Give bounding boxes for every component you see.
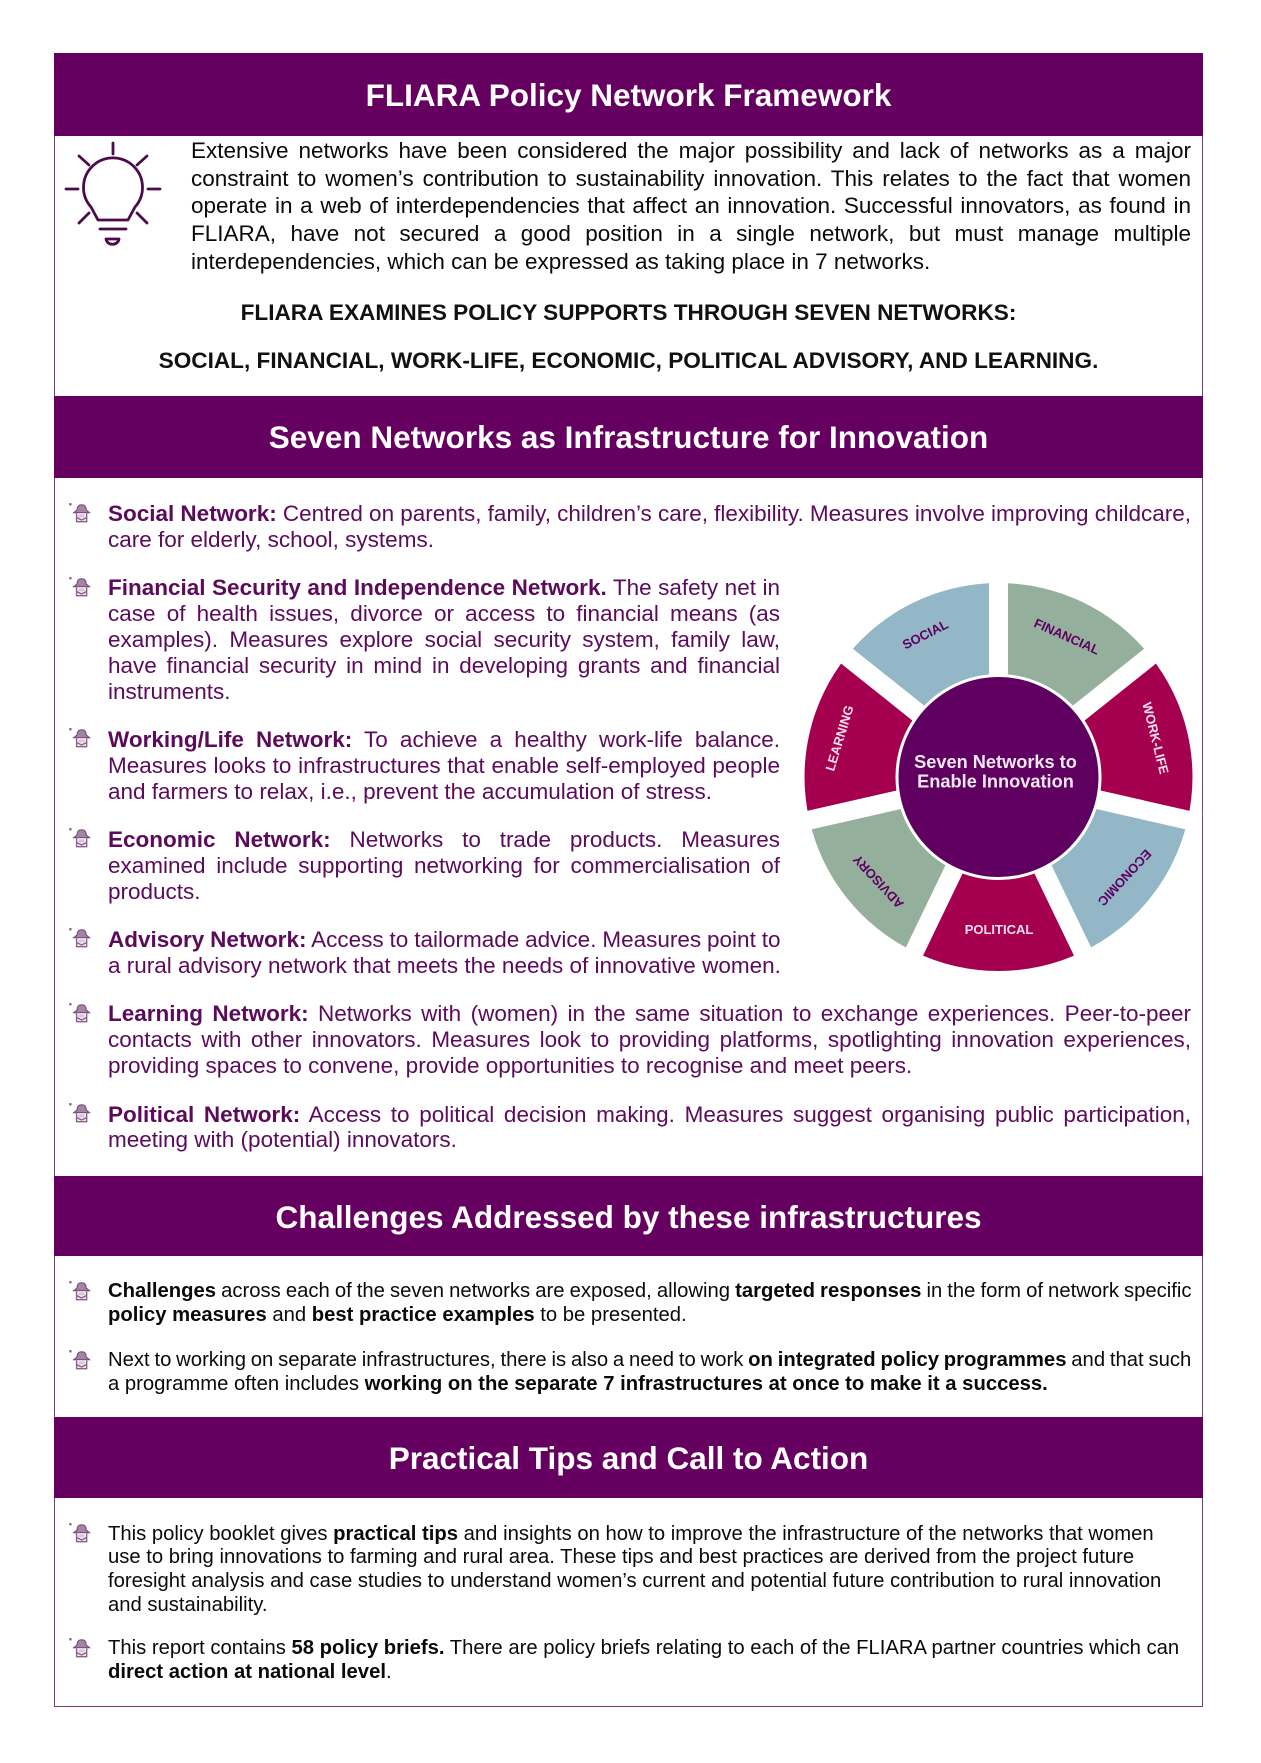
- text: learning network: Learning Network: Networks with (women) in the same situation to exchange experiences. Peer-to-peer: [108, 1001, 1191, 1026]
- heading: Seven Networks as Infrastructure for Innovation: [54, 396, 1203, 478]
- label: advisory: ADVISORY: [850, 852, 907, 911]
- text: economic network: products.: [108, 879, 201, 904]
- heading: FLIARA Policy Network Framework: [54, 53, 1203, 136]
- segment: political: [914, 777, 1083, 971]
- text: social network: Social Network: Centred on parents, family, children’s care, flexibility. Measures involve improving childcare,: [108, 501, 1191, 526]
- text: political network: meeting with (potential) innovators.: [108, 1127, 457, 1152]
- text: working/life network: Measures looks to infrastructures that enable self-employed people: [108, 753, 780, 778]
- text: social network: care for elderly, school, systems.: [108, 527, 434, 552]
- bullet icon: financial: [69, 577, 91, 596]
- text: financial network: examples). Measures explore social security system, family law,: [108, 627, 780, 652]
- text: 58 policy briefs: This report contains 58 policy briefs. There are policy briefs relating to each of the FLIARA partner countries which can: [108, 1637, 1179, 1659]
- bullet icon: tips 1: [69, 1523, 91, 1542]
- bullet icon: tips 2: [69, 1638, 91, 1658]
- text: integrated programmes: a programme often includes working on the separate 7 infrastructures at once to make it a success.: [108, 1373, 1048, 1395]
- label: financial: FINANCIAL: [1032, 615, 1102, 658]
- bullet icon: advisory: [69, 928, 91, 948]
- text: financial network: [108, 575, 780, 704]
- text: policy booklet: This policy booklet gives practical tips and insights on how to improve the infrastructure of the networks that women: [108, 1523, 1154, 1545]
- text: working/life network: and farmers to relax, i.e., prevent the accumulation of stress.: [108, 779, 712, 804]
- text: political network: [108, 1102, 1191, 1152]
- text: learning network: contacts with other innovators. Measures look to providing platforms, spotlighting innovation experiences,: [108, 1027, 1191, 1052]
- text: policy booklet: and sustainability.: [108, 1594, 267, 1616]
- segment: social: [847, 583, 998, 777]
- text: 58 policy briefs: direct action at national level.: [108, 1661, 392, 1683]
- text: working/life network: Working/Life Network: To achieve a healthy work-life balance.: [108, 727, 780, 752]
- text: economic network: examined include supporting networking for commercialisation of: [108, 853, 780, 878]
- text: integrated programmes: Next to working on separate infrastructures, there is also a need to work on integrated policy programmes and that such: [108, 1349, 1191, 1371]
- text: political network: Political Network: Access to political decision making. Measures suggest organising public participation,: [108, 1102, 1191, 1127]
- text: economic network: Economic Network: Networks to trade products. Measures: [108, 827, 780, 852]
- heading: Seven Networks as Infrastructure for Innovation: Seven Networks as Infrastructure for Innovation: [269, 419, 988, 455]
- text: policy booklet: use to bring innovations to farming and rural area. These tips and best practices are derived from the project future: [108, 1546, 1134, 1568]
- segment: economic: [998, 777, 1188, 952]
- heading: Challenges Addressed by these infrastructures: Challenges Addressed by these infrastructures: [275, 1199, 982, 1235]
- label: political: POLITICAL: [965, 922, 1033, 937]
- label: learning: LEARNING: [822, 703, 857, 773]
- text: challenges exposed: Challenges across each of the seven networks are exposed, allowing targeted responses in the form of network specific: [108, 1280, 1192, 1302]
- segment: financial: [998, 583, 1150, 777]
- text block: introduction: constraint to women’s contribution to sustainability innovation. This relates to the fact that women: [191, 166, 1191, 191]
- text: policy booklet: [108, 1523, 1161, 1616]
- text: working/life network: [108, 727, 780, 804]
- text block: introduction: interdependencies, which can be expressed as taking place in 7 networks.: [191, 249, 930, 274]
- text block: introduction: Extensive networks have been considered the major possibility and lack of networks as a major: [191, 138, 1191, 163]
- bullet icon: working life: [69, 728, 91, 748]
- text: financial network: Financial Security and Independence Network. The safety net in: [108, 575, 780, 600]
- bullet icon: challenges 1: [69, 1281, 91, 1300]
- text: 58 policy briefs: [108, 1637, 1179, 1683]
- bullet icon: challenges 2: [69, 1350, 91, 1370]
- text: social network: [108, 501, 1191, 552]
- label: work-life: WORK-LIFE: [1139, 701, 1172, 776]
- label: economic: ECONOMIC: [1094, 846, 1155, 909]
- center label: Enable Innovation: [917, 772, 1074, 792]
- callout: seven networks statement line 1: FLIARA EXAMINES POLICY SUPPORTS THROUGH SEVEN NETWORKS:: [241, 300, 1016, 325]
- center circle: [898, 677, 1098, 877]
- text: integrated programmes: [108, 1349, 1191, 1395]
- bullet icon: economic: [69, 828, 91, 848]
- text: advisory network: Advisory Network: Access to tailormade advice. Measures point to: [108, 927, 780, 952]
- heading: Practical Tips and Call to Action: [54, 1417, 1203, 1498]
- segment: advisory: [809, 777, 998, 952]
- text block: introduction: FLIARA, have not secured a good position in a single network, but must manage multiple: [191, 221, 1191, 246]
- heading: Challenges Addressed by these infrastructures: [54, 1176, 1203, 1256]
- segment: work-life: [998, 656, 1192, 820]
- heading: FLIARA Policy Network Framework: FLIARA Policy Network Framework: [366, 77, 891, 113]
- segment: learning: [805, 656, 998, 820]
- callout: seven networks statement line 2: SOCIAL, FINANCIAL, WORK-LIFE, ECONOMIC, POLITICAL ADVISORY, AND LEARNING.: [159, 348, 1098, 373]
- text: financial network: have financial security in mind in developing grants and financial: [108, 653, 780, 678]
- label: social: SOCIAL: [900, 617, 951, 652]
- text block: introduction: operate in a web of interdependencies that affect an innovation. Successful innovators, as found in: [191, 193, 1191, 218]
- text: challenges exposed: policy measures and best practice examples to be presented.: [108, 1304, 687, 1326]
- heading: Practical Tips and Call to Action: Practical Tips and Call to Action: [389, 1440, 868, 1476]
- icon: light bulb: [64, 142, 162, 246]
- bullet icon: social: [69, 503, 91, 522]
- text: learning network: providing spaces to convene, provide opportunities to recognise and meet peers.: [108, 1053, 912, 1078]
- text: economic network: [108, 827, 780, 904]
- text: learning network: [108, 1001, 1191, 1078]
- text: policy booklet: foresight analysis and case studies to understand women’s current and potential future contribution to rural innovation: [108, 1570, 1161, 1592]
- center label: Seven Networks to: [914, 752, 1077, 772]
- text: challenges exposed: [108, 1280, 1192, 1326]
- chart: seven networks wheel: [804, 583, 1202, 971]
- text: financial network: case of health issues, divorce or access to financial means (as: [108, 601, 780, 626]
- text: financial network: instruments.: [108, 679, 231, 704]
- bullet icon: learning: [69, 1003, 91, 1022]
- text block: introduction: [191, 138, 1191, 274]
- text: advisory network: a rural advisory network that meets the needs of innovative women.: [108, 953, 781, 978]
- bullet icon: political: [69, 1103, 91, 1122]
- text: advisory network: [108, 927, 781, 978]
